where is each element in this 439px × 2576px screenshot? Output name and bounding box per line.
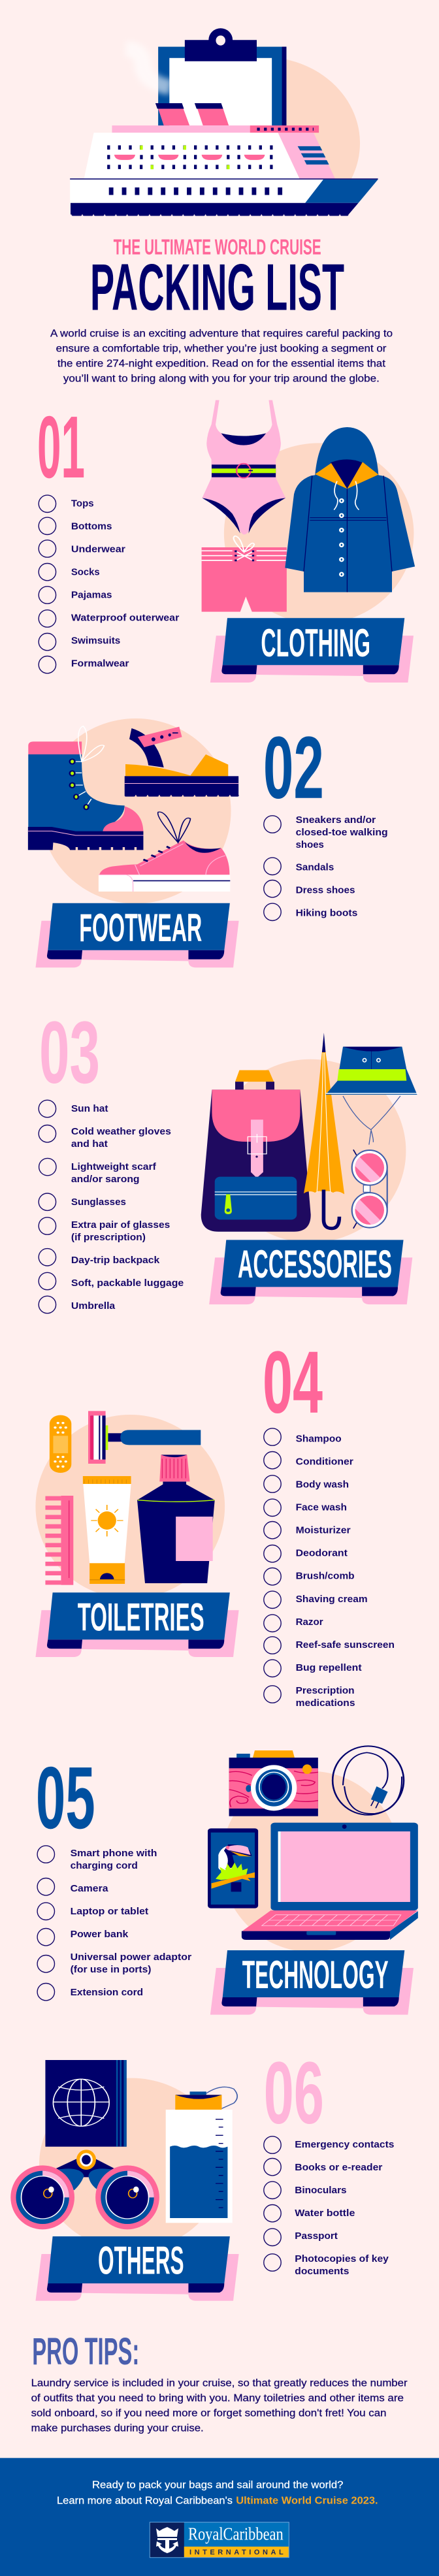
logo: royal caribbean international: INTERNATIONAL	[189, 2549, 284, 2556]
banner: others	[35, 2236, 239, 2301]
call to action	[57, 2479, 378, 2506]
checklist: toiletries	[264, 1428, 395, 1709]
panel: footwear	[28, 718, 388, 967]
checklist: accessories: Sun hat	[71, 1103, 108, 1114]
icon: charging cord	[333, 1746, 404, 1815]
checklist: technology: Camera	[71, 1883, 108, 1894]
checklist: toiletries: Moisturizer	[296, 1525, 351, 1536]
checklist: clothing: Bottoms	[71, 521, 112, 532]
banner: technology	[210, 1950, 414, 2015]
checklist: others: documents	[295, 2266, 349, 2277]
illustration: technology	[208, 1746, 418, 1952]
call to action: Learn more about Royal Caribbean's	[57, 2495, 233, 2506]
icon: passport	[45, 2060, 127, 2147]
checklist: others: Books or e-reader	[295, 2162, 383, 2173]
upper deck	[112, 125, 319, 133]
clipboard	[158, 28, 286, 127]
checklist: others: Water bottle	[295, 2208, 355, 2219]
checklist: clothing: Pajamas	[71, 590, 112, 601]
checklist: footwear: closed-toe walking	[296, 827, 388, 838]
checklist: accessories: Cold weather gloves	[71, 1126, 171, 1137]
intro text: the entire 274-night expedition. Read on for the essential items that	[57, 358, 385, 369]
checklist: technology: Laptop or tablet	[71, 1906, 148, 1917]
icon: backpack	[201, 1071, 311, 1232]
checklist: toiletries: Prescription	[296, 1685, 355, 1696]
number 04: 04	[263, 1333, 323, 1432]
icon: bottle	[137, 1455, 215, 1583]
icon: bandage	[50, 1415, 71, 1473]
checklist: toiletries: medications	[296, 1698, 355, 1709]
checklist: toiletries: Face wash	[296, 1502, 347, 1513]
checklist: others	[264, 2136, 394, 2277]
checklist: toiletries: Brush/comb	[296, 1571, 355, 1582]
checklist: toiletries: Razor	[296, 1617, 323, 1628]
illustration: toiletries	[35, 1411, 225, 1598]
checklist: clothing: Waterproof outerwear	[71, 613, 179, 624]
checklist: accessories	[39, 1100, 184, 1313]
logo: royal caribbean international	[150, 2522, 289, 2558]
intro text: you’ll want to bring along with you for your trip around the globe.	[63, 373, 380, 384]
illustration: others	[10, 2060, 237, 2250]
checklist: accessories: Soft, packable luggage	[71, 1278, 184, 1289]
checklist: technology: Power bank	[71, 1929, 129, 1940]
checklist: accessories: and hat	[71, 1138, 108, 1150]
checklist: clothing	[39, 495, 179, 673]
number 05: 05	[36, 1748, 95, 1847]
checklist: others: Photocopies of key	[295, 2253, 389, 2264]
peach sun	[280, 59, 360, 179]
panel: others	[10, 2044, 394, 2301]
checklist: technology: Universal power adaptor	[71, 1952, 191, 1963]
icon: sandal	[125, 727, 238, 796]
icon: boot	[28, 726, 143, 850]
checklist: accessories: (if prescription)	[71, 1232, 146, 1243]
checklist: technology: charging cord	[71, 1860, 138, 1871]
icon: binoculars	[10, 2149, 159, 2229]
logo: royal caribbean international: RoyalCaribbean	[188, 2524, 284, 2543]
number 02: 02	[263, 718, 324, 817]
call to action: Ultimate World Cruise 2023.	[236, 2495, 378, 2506]
panel: accessories	[39, 1003, 419, 1313]
checklist: toiletries: Shaving cream	[296, 1594, 368, 1605]
hull	[70, 178, 378, 215]
checklist: others: Passport	[295, 2230, 338, 2242]
checklist: footwear: Sandals	[296, 862, 334, 873]
banner label: footwear: FOOTWEAR	[79, 906, 202, 950]
number 06: 06	[264, 2044, 324, 2142]
illustration: accessories	[201, 1033, 419, 1243]
icon: bucket hat	[325, 1047, 419, 1145]
icon: swimsuit	[202, 400, 285, 534]
checklist: clothing: Tops	[71, 498, 94, 509]
text block: pro tips: make purchases during your cruise.	[31, 2423, 204, 2434]
checklist: technology: (for use in ports)	[71, 1964, 152, 1975]
checklist: clothing: Underwear	[71, 544, 125, 555]
icon: sneaker	[99, 812, 230, 892]
checklist: technology: Extension cord	[71, 1987, 143, 1998]
checklist: others: Binoculars	[295, 2185, 347, 2196]
panel: clothing	[37, 398, 415, 683]
checklist: footwear	[264, 814, 388, 921]
checklist: accessories: Day-trip backpack	[71, 1255, 160, 1266]
icon: smartphone with toucan	[208, 1828, 258, 1908]
icon: comb	[53, 1496, 73, 1585]
panel: technology	[36, 1746, 418, 2015]
banner: clothing	[210, 618, 414, 683]
checklist: accessories: Umbrella	[71, 1300, 116, 1312]
superstructure	[84, 133, 335, 179]
icon: raincoat	[285, 427, 415, 592]
funnels	[155, 103, 229, 125]
checklist: clothing: Socks	[71, 567, 100, 578]
icon: sunscreen tube	[83, 1476, 131, 1584]
panel: toiletries	[35, 1333, 395, 1709]
banner label: others: OTHERS	[98, 2239, 184, 2283]
icon: crown and anchor	[156, 2527, 178, 2553]
banner: toiletries	[35, 1592, 239, 1657]
checklist: accessories: and/or sarong	[71, 1174, 140, 1185]
banner label: toiletries: TOILETRIES	[78, 1596, 204, 1639]
intro text: ensure a comfortable trip, whether you’re just booking a segment or	[56, 344, 387, 354]
checklist: footwear: Hiking boots	[296, 908, 357, 919]
illustration: clothing	[202, 400, 415, 624]
checklist: footwear: Sneakers and/or	[296, 814, 376, 826]
text block: pro tips	[31, 2377, 408, 2434]
icon: razor	[88, 1411, 201, 1464]
checklist: toiletries: Reef-safe sunscreen	[296, 1639, 395, 1650]
intro text: A world cruise is an exciting adventure that requires careful packing to	[50, 328, 393, 340]
banner: accessories	[209, 1240, 412, 1304]
text block: pro tips: Laundry service is included in your cruise, so that greatly reduces the number	[31, 2377, 408, 2389]
panel: clothing: 01	[37, 398, 85, 496]
checklist: footwear: shoes	[296, 839, 324, 850]
icon: sunglasses	[352, 1150, 387, 1229]
checklist: toiletries: Bug repellent	[296, 1662, 362, 1673]
footer band	[0, 2458, 439, 2576]
checklist: accessories: Lightweight scarf	[71, 1161, 157, 1172]
checklist: toiletries: Body wash	[296, 1479, 349, 1490]
text block: pro tips: sold onboard, so if you need more or forget something don't fret! You can	[31, 2407, 387, 2419]
checklist: toiletries: Shampoo	[296, 1434, 342, 1445]
checklist: toiletries: Conditioner	[296, 1457, 353, 1468]
banner: footwear	[35, 903, 239, 967]
checklist: toiletries: Deodorant	[296, 1548, 348, 1559]
checklist: technology: Smart phone with	[71, 1848, 157, 1859]
intro text	[50, 328, 393, 384]
checklist: others: Emergency contacts	[295, 2139, 394, 2150]
checklist: clothing: Formalwear	[71, 658, 129, 669]
checklist: accessories: Extra pair of glasses	[71, 1219, 170, 1231]
icon: laptop	[242, 1823, 418, 1940]
illustration: footwear	[28, 718, 238, 903]
heading: pro tips: PRO TIPS:	[32, 2330, 139, 2373]
title: the ultimate world cruise: THE ULTIMATE WORLD CRUISE	[114, 236, 321, 260]
smoke	[126, 49, 171, 88]
icon: camera	[229, 1750, 318, 1816]
call to action: Ready to pack your bags and sail around the world?	[92, 2479, 343, 2490]
icon: shorts	[202, 536, 287, 612]
text block: pro tips: of outfits that you need to bring with you. Many toiletries and other items are	[31, 2392, 404, 2404]
checklist: accessories: Sunglasses	[71, 1197, 126, 1208]
number 03: 03	[39, 1003, 100, 1102]
illustration: cruise ship and clipboard	[70, 28, 378, 215]
icon: umbrella	[304, 1033, 344, 1229]
checklist: technology	[37, 1846, 191, 2001]
icon: water bottle	[166, 2087, 237, 2223]
checklist: footwear: Dress shoes	[296, 885, 355, 896]
checklist: clothing: Swimsuits	[71, 636, 120, 647]
